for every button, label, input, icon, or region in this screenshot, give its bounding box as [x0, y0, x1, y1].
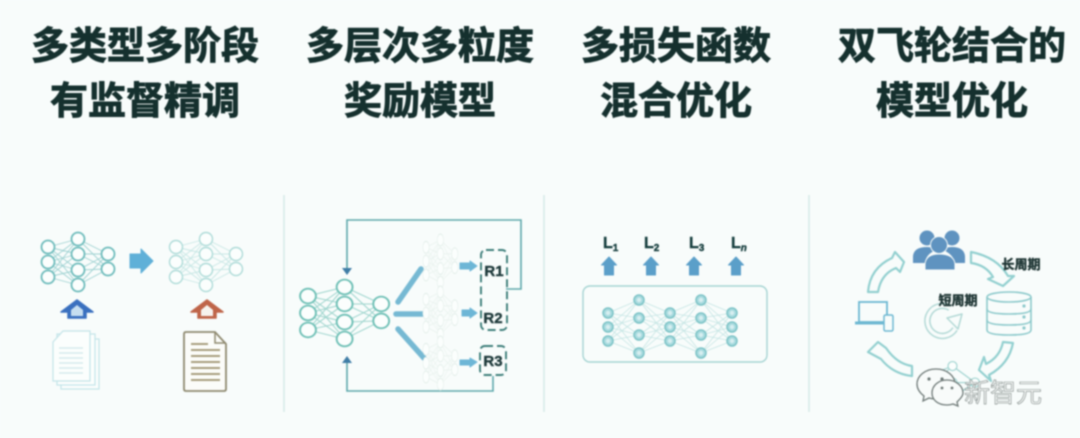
loss labels: n: [741, 243, 747, 254]
heading: column 2: 奖励模型: [344, 81, 496, 123]
box: R3: R3: [483, 353, 503, 370]
icon: small networks: [423, 234, 458, 390]
chart: deep network: [603, 295, 737, 358]
icon: single document: [184, 332, 226, 391]
loss labels: L: [603, 235, 613, 252]
loss labels: [603, 235, 747, 254]
arrow: feedback from R3: [342, 356, 493, 391]
panel: dual flywheel: [855, 230, 1041, 402]
heading: column 4: 模型优化: [876, 81, 1028, 123]
heading: column 1: [31, 26, 259, 123]
box: R1 and R2: R1: [484, 263, 504, 280]
arrow: users to database: [971, 252, 1014, 286]
heading: column 1: 有监督精调: [50, 81, 240, 123]
arrow: network to network: [130, 249, 153, 273]
heading: column 2: [306, 26, 534, 123]
icon: target neural network: [170, 232, 242, 292]
heading: column 3: 多损失函数: [581, 26, 771, 68]
box: R1 and R2: R2: [483, 310, 503, 327]
loss labels: 2: [654, 243, 660, 254]
watermark text: 新智元: [964, 378, 1042, 408]
loss labels: 1: [613, 243, 619, 254]
icon: main neural network: [300, 280, 389, 346]
label: short cycle: 短周期: [938, 293, 978, 308]
panel: multi-loss optimization: [583, 235, 767, 362]
heading: column 4: [838, 26, 1066, 123]
arrow: feedback from R1 and R2: [342, 220, 521, 289]
icon: users: [913, 230, 965, 270]
box: network frame: [583, 286, 767, 362]
watermark: WeChat logo and name: [917, 369, 1042, 408]
arrow: red up arrow: [191, 300, 223, 318]
loss labels: L: [731, 235, 741, 252]
icon: short loop: [927, 306, 962, 336]
arrow: blue up arrow: [61, 300, 93, 318]
panel: supervised fine-tuning: [42, 232, 242, 391]
loss labels: 3: [699, 243, 705, 254]
icon: stack of documents: [53, 331, 99, 389]
heading: column 1: 多类型多阶段: [31, 26, 259, 68]
icon: database: [987, 292, 1031, 335]
loss labels: L: [644, 235, 654, 252]
panel: multi-level reward model: [300, 220, 521, 391]
arrows: thick branch lines: [396, 269, 424, 358]
loss labels: L: [689, 235, 699, 252]
icon: devices: [855, 302, 893, 331]
heading: column 2: 多层次多粒度: [306, 26, 534, 68]
arrow: devices to users: [868, 252, 904, 292]
arrows: loss up arrows: [602, 257, 744, 275]
icon: WeChat bubbles: [917, 369, 963, 406]
box: R3: [480, 346, 506, 375]
arrow: model to devices: [868, 342, 912, 376]
heading: column 3: 混合优化: [600, 81, 752, 123]
arrows: to reward boxes: [460, 261, 477, 367]
arrow: database to model: [979, 342, 1013, 381]
icon: source neural network: [42, 232, 114, 292]
heading: column 3: [581, 26, 771, 123]
box: R1 and R2: [481, 250, 507, 330]
label: long cycle: 长周期: [1001, 257, 1041, 272]
icon: model network: [926, 362, 980, 402]
heading: column 4: 双飞轮结合的: [838, 26, 1066, 68]
